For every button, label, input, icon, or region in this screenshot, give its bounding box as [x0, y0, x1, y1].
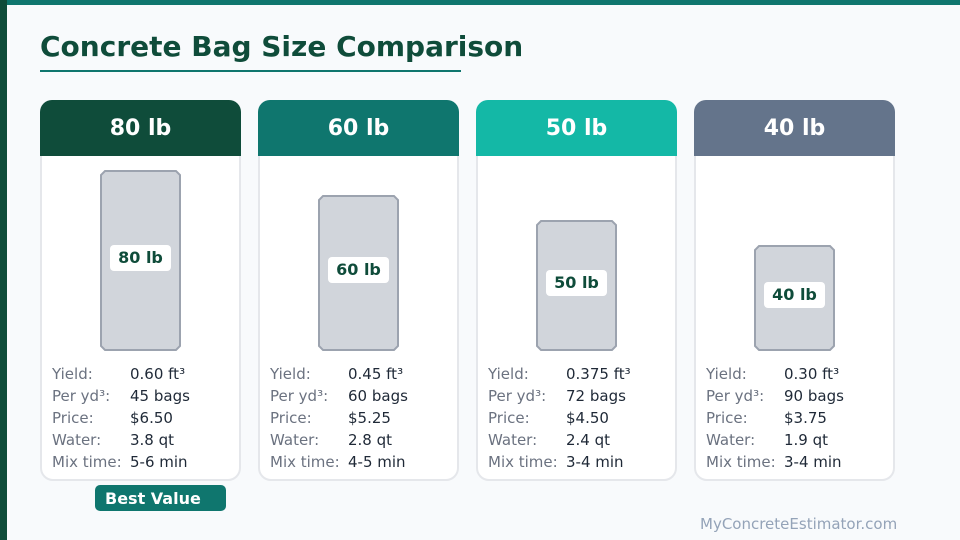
panel: 60 lb bag: Mix time: [270, 453, 340, 471]
panel: 50 lb bag: 50 lb [554, 273, 599, 292]
panel: 60 lb bag: 60 bags [348, 387, 408, 405]
panel: 50 lb bag: 72 bags [566, 387, 626, 405]
panel: 40 lb bag: Yield: [705, 365, 747, 383]
panel: 60 lb bag [258, 100, 459, 480]
panel: 50 lb bag: $4.50 [566, 409, 609, 427]
panel: 40 lb bag: 0.30 ft³ [784, 365, 839, 383]
panel: 60 lb bag: Water: [270, 431, 319, 449]
panel: 80 lb bag: 5-6 min [130, 453, 188, 471]
panel: 50 lb bag: 3-4 min [566, 453, 624, 471]
panel: 80 lb bag: Price: [52, 409, 94, 427]
panel: 60 lb bag: 4-5 min [348, 453, 406, 471]
panel: 60 lb bag: 2.8 qt [348, 431, 392, 449]
panel: 40 lb bag: Mix time: [706, 453, 776, 471]
panel: 80 lb bag: 80 lb [110, 116, 171, 141]
panel: 80 lb bag: Yield: [51, 365, 93, 383]
panel: 60 lb bag: $5.25 [348, 409, 391, 427]
panel: 50 lb bag: 0.375 ft³ [566, 365, 631, 383]
title: Concrete Bag Size Comparison [40, 30, 523, 63]
panel: 40 lb bag: 1.9 qt [784, 431, 828, 449]
panel: 80 lb bag: Per yd³: [52, 387, 110, 405]
panel: 80 lb bag: Mix time: [52, 453, 122, 471]
panel: 40 lb bag: 40 lb [764, 116, 825, 141]
panel: 80 lb bag [40, 100, 241, 480]
panel: 50 lb bag: 2.4 qt [566, 431, 610, 449]
panel: 60 lb bag: 60 lb [328, 116, 389, 141]
panel: 50 lb bag: Water: [488, 431, 537, 449]
panel: 50 lb bag: Mix time: [488, 453, 558, 471]
panel: 40 lb bag: Price: [706, 409, 748, 427]
panel: 40 lb bag [694, 100, 895, 480]
panel: 80 lb bag: 45 bags [130, 387, 190, 405]
panel: 50 lb bag: 50 lb [546, 116, 607, 141]
panel: 50 lb bag: Price: [488, 409, 530, 427]
panel: 50 lb bag: Yield: [487, 365, 529, 383]
footer: website credit: MyConcreteEstimator.com [700, 515, 897, 533]
panel: 40 lb bag: 90 bags [784, 387, 844, 405]
panel: 50 lb bag: Per yd³: [488, 387, 546, 405]
panel: 40 lb bag: Per yd³: [706, 387, 764, 405]
panel: 40 lb bag: 3-4 min [784, 453, 842, 471]
panel: 80 lb bag: 0.60 ft³ [130, 365, 185, 383]
panel: 80 lb bag: 80 lb [118, 248, 163, 267]
panel: 40 lb bag: Water: [706, 431, 755, 449]
panel: 80 lb bag: 3.8 qt [130, 431, 174, 449]
panel: 40 lb bag: $3.75 [784, 409, 827, 427]
panel: 60 lb bag: 60 lb [336, 260, 381, 279]
badge: best value [95, 485, 226, 511]
panel: 60 lb bag: Yield: [269, 365, 311, 383]
panel: 50 lb bag [476, 100, 677, 480]
badge: best value: Best Value [105, 489, 201, 508]
panel: 60 lb bag: Per yd³: [270, 387, 328, 405]
panel: 80 lb bag: Water: [52, 431, 101, 449]
panel: 80 lb bag: $6.50 [130, 409, 173, 427]
panel: 60 lb bag: Price: [270, 409, 312, 427]
panel: 60 lb bag: 0.45 ft³ [348, 365, 403, 383]
panel: 40 lb bag: 40 lb [772, 285, 817, 304]
